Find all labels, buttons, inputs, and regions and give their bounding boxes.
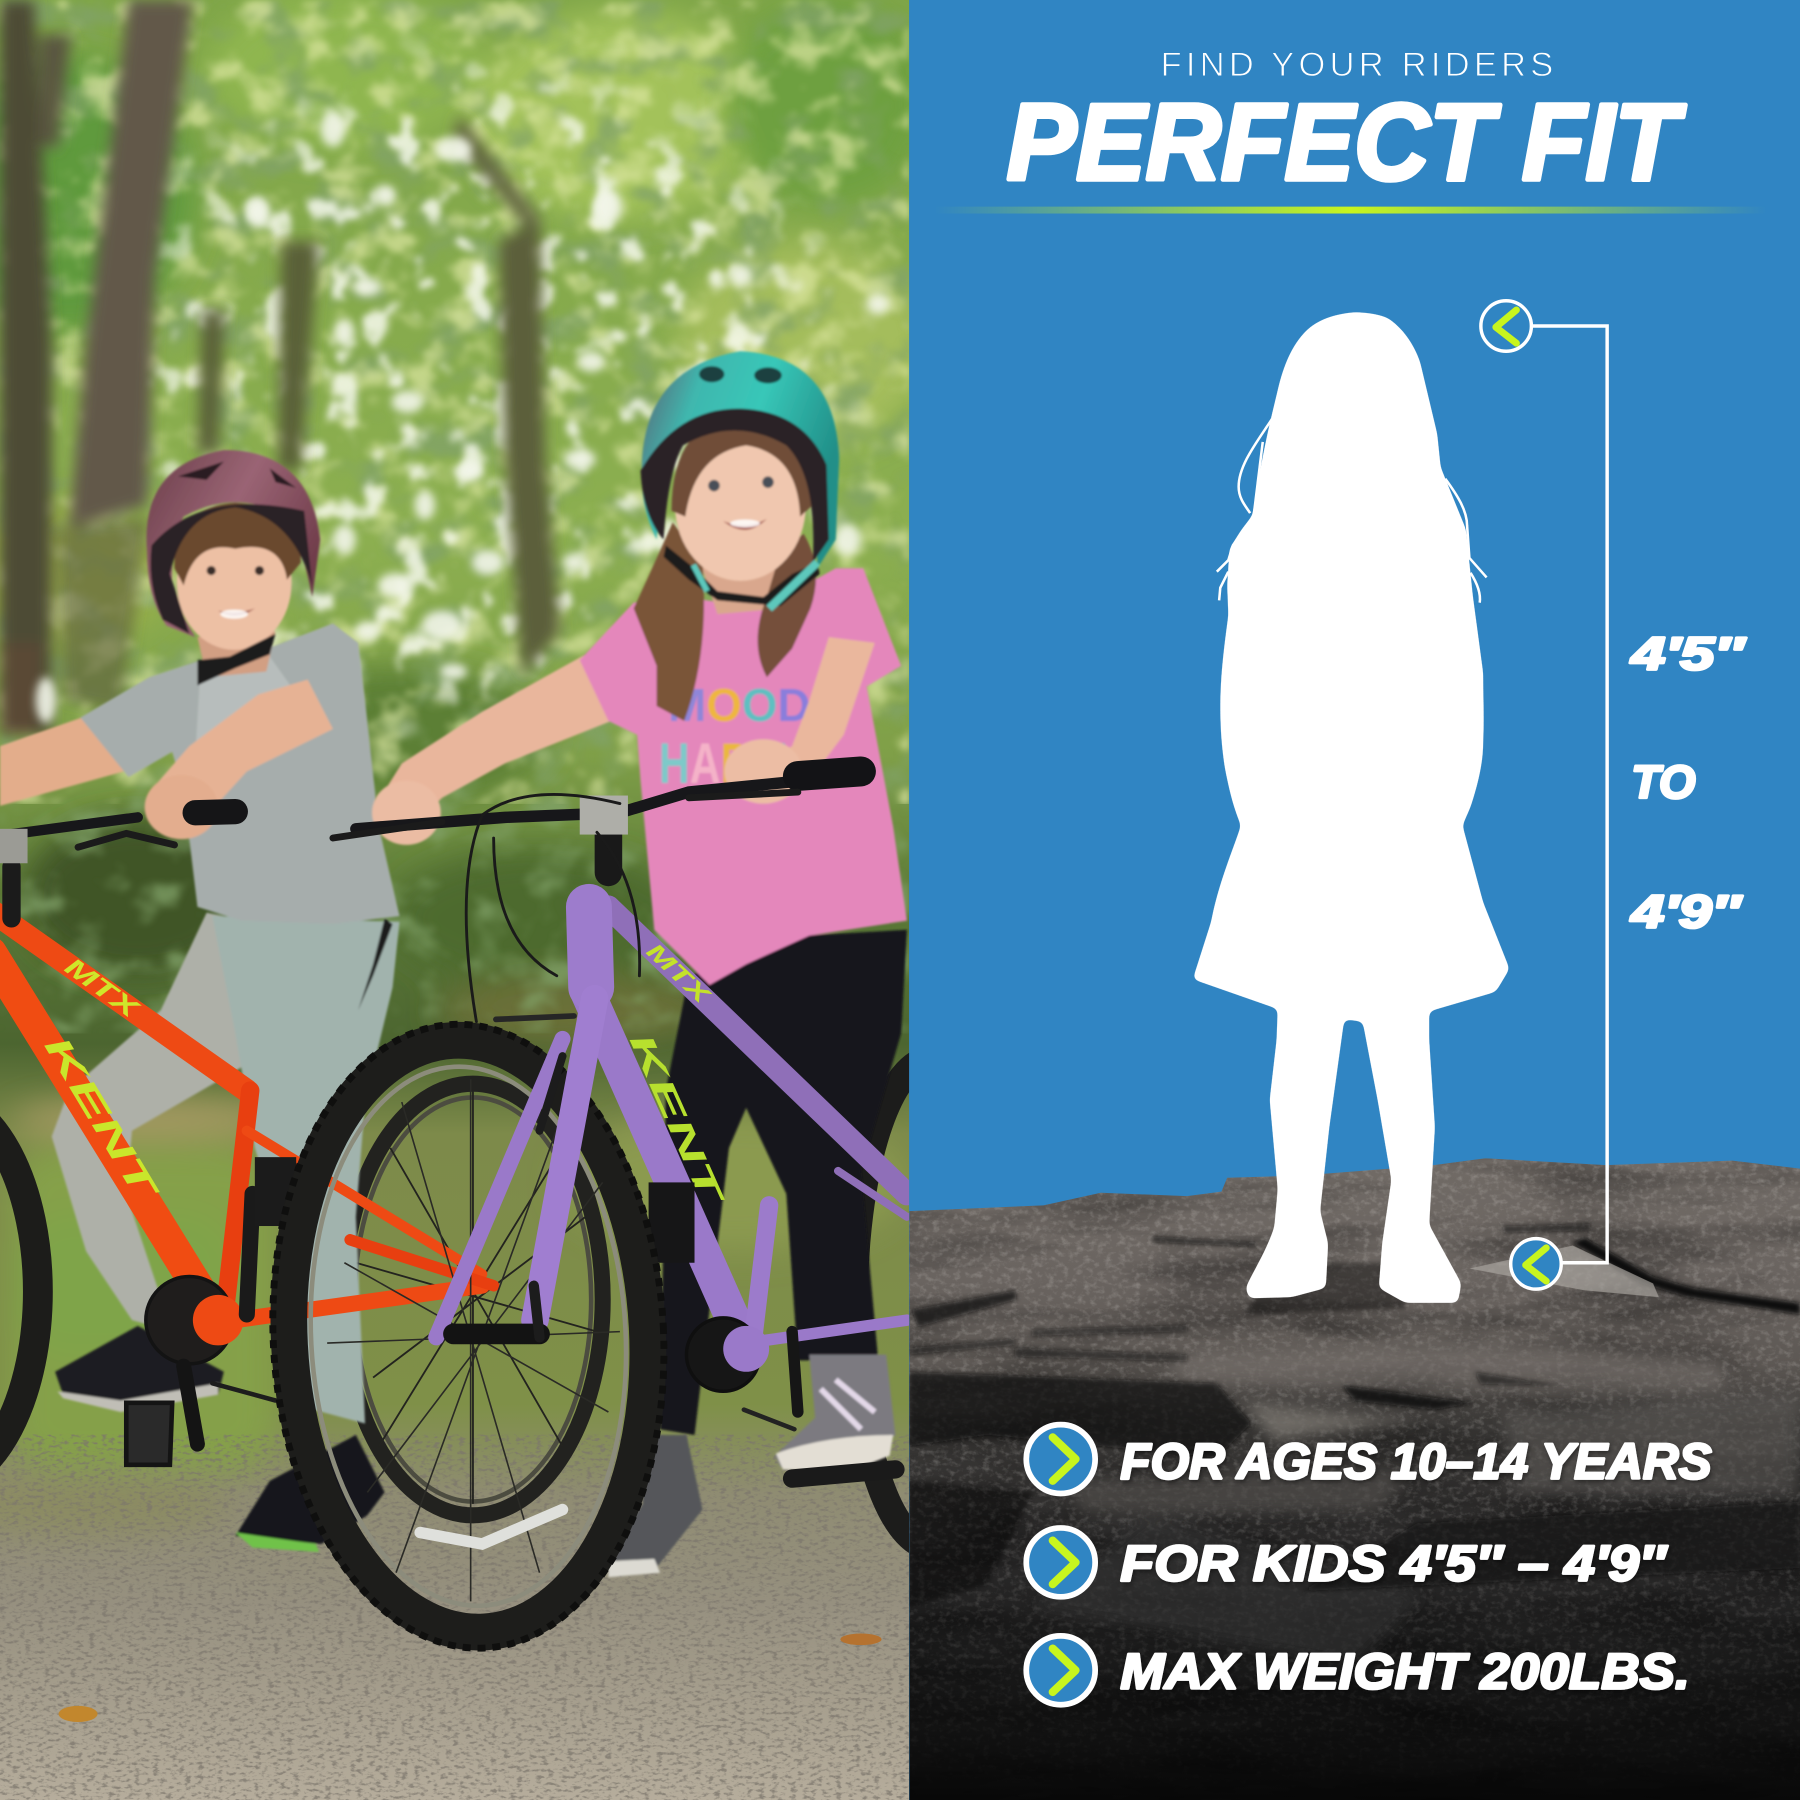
girl: left arm xyxy=(373,654,620,827)
purple bike front wheel xyxy=(257,1014,680,1658)
forest background xyxy=(0,0,930,1800)
girl: right arm xyxy=(752,637,875,781)
purple bike fork and hub xyxy=(420,907,595,1544)
girl: pigtails xyxy=(634,522,704,721)
girl: front shoe xyxy=(775,1355,895,1467)
boy: shorts and shin xyxy=(212,916,399,1423)
boy: shoe front xyxy=(235,1435,385,1544)
girl: leggings xyxy=(660,930,907,1435)
boy: back thigh xyxy=(50,912,242,1325)
orange bike: MTX logo: MTX xyxy=(60,952,146,1025)
purple bike rear wheel xyxy=(860,1052,910,1553)
feature list xyxy=(1026,1425,1712,1705)
girl: face xyxy=(675,429,806,581)
girl: rear shoe xyxy=(606,1435,703,1575)
boy: shoe rear xyxy=(55,1326,224,1410)
orange bike: KENT logo: KENT xyxy=(37,1029,166,1209)
purple bike: KENT logo: KENT xyxy=(623,1027,731,1212)
foliage texture xyxy=(0,0,909,1033)
girl: neck xyxy=(700,551,783,614)
rock: cracks and shadows xyxy=(909,1224,1800,1607)
orange bike: crank and chainring xyxy=(146,1277,233,1364)
girl: shirt lettering second line: HAPPY xyxy=(659,732,806,796)
orange bike xyxy=(0,812,494,1465)
label: 4 foot 5: 4′5″ xyxy=(1630,627,1746,679)
feature: weight xyxy=(1026,1636,1690,1705)
boy: left arm xyxy=(0,714,124,806)
feature: weight: MAX WEIGHT 200LBS. xyxy=(1120,1643,1690,1700)
label: 4 foot 9: 4′9″ xyxy=(1630,886,1743,938)
rock ground xyxy=(909,1148,1800,1800)
boy: helmet xyxy=(146,450,320,637)
silhouette hair strands xyxy=(1217,419,1487,603)
boy: grey t-shirt xyxy=(80,623,399,924)
feature: ages: FOR AGES 10–14 YEARS xyxy=(1120,1433,1712,1490)
panel: blue sizing background xyxy=(909,0,1800,1800)
girl: chin straps xyxy=(664,545,820,606)
ground gravel texture xyxy=(0,1435,909,1800)
girl: shirt lettering: MOOD xyxy=(668,679,810,731)
girl height silhouette xyxy=(1193,312,1510,1303)
boy: neck and face xyxy=(197,631,276,677)
rear wheel of orange bike xyxy=(343,1084,603,1515)
orange bike: seat and top tube xyxy=(0,913,247,1091)
height labels xyxy=(1630,627,1746,938)
girl xyxy=(372,351,907,1577)
label: to: TO xyxy=(1631,756,1696,808)
heading: perfect fit: PERFECT FIT xyxy=(1007,82,1686,204)
orange bike: head tube and handlebar xyxy=(3,867,19,918)
purple bike frame xyxy=(588,907,907,1479)
feature: height xyxy=(1026,1528,1668,1597)
girl: pink t-shirt xyxy=(580,568,907,985)
purple bike: crank xyxy=(686,1318,760,1391)
rock: lighter patches xyxy=(1033,1343,1800,1665)
height range bracket xyxy=(1481,301,1607,1289)
front wheel of orange bike xyxy=(0,1099,38,1484)
girl: helmet xyxy=(642,351,839,568)
panel: photo of kids on bikes xyxy=(0,0,1010,1800)
purple bike handlebar and cables xyxy=(333,771,861,1022)
icon: top left chevron marker xyxy=(1481,301,1531,351)
heading underline xyxy=(934,207,1767,214)
heading: find your riders: FIND YOUR RIDERS xyxy=(1161,46,1553,84)
boy: chin strap xyxy=(197,634,276,685)
purple bike: MTX logo: MTX xyxy=(642,937,717,1010)
feature: height: FOR KIDS 4′5″ – 4′9″ xyxy=(1120,1535,1668,1592)
boy xyxy=(0,450,399,1552)
icon: bottom left chevron marker xyxy=(1511,1239,1561,1289)
boy: right arm xyxy=(149,680,333,809)
